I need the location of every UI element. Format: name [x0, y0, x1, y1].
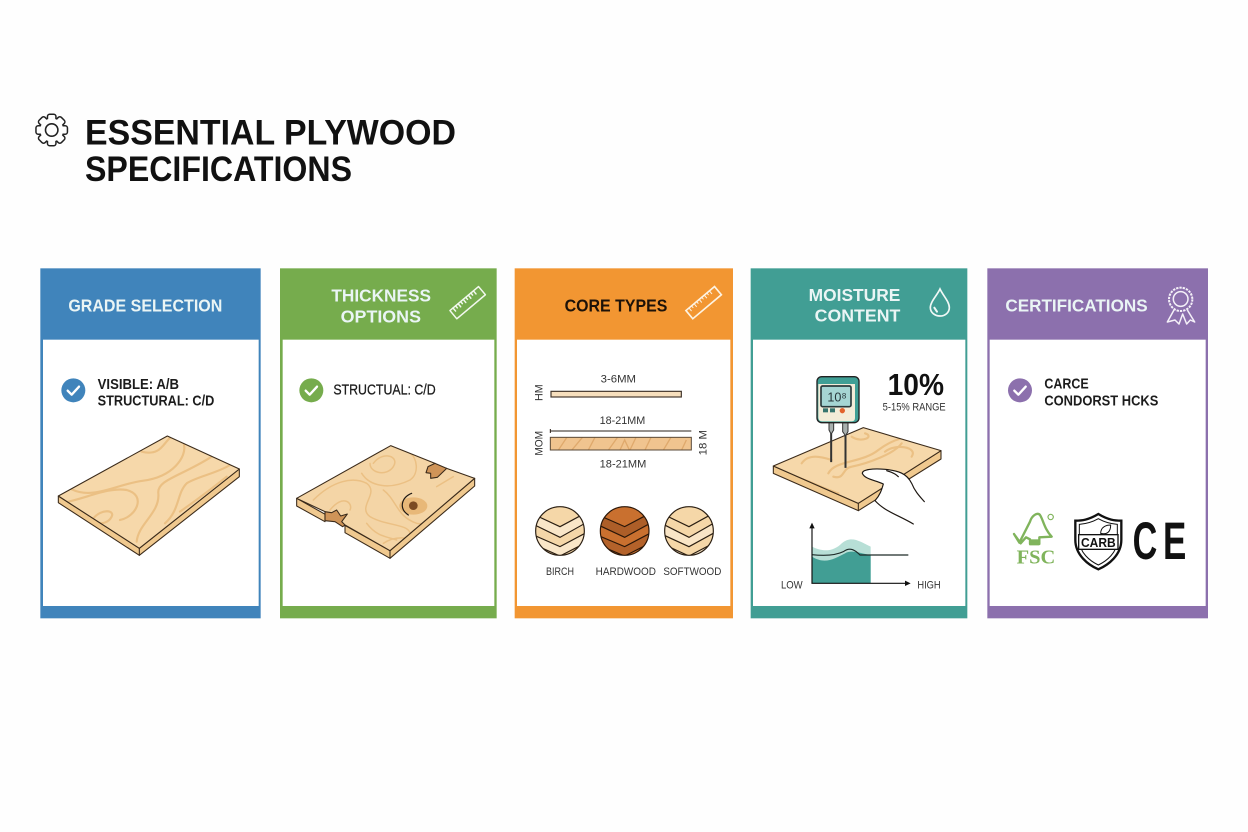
text: structural grade: STRUCTUAL: C/D: [333, 383, 436, 399]
heading: core types: CORE TYPES: [565, 296, 667, 316]
text: grades: [98, 377, 214, 410]
logo: CE: C: [1133, 512, 1157, 571]
icon: check: [61, 378, 85, 402]
panel: core types: [515, 268, 733, 618]
diagram: thick sheet: 18 M: [697, 430, 709, 455]
text: certification note: CONDORST HCKS: [1044, 393, 1158, 409]
heading: moisture content: [809, 285, 900, 326]
meter probes: [829, 419, 848, 467]
illustration: plywood sheet with knots: [297, 446, 475, 558]
chart: moisture range: [781, 523, 941, 591]
icon: award ribbon: [1167, 288, 1195, 324]
text: certification note: [1044, 377, 1158, 409]
diagram: thick sheet: MOM: [533, 431, 545, 456]
labels: core species: HARDWOOD: [596, 566, 656, 578]
panel: thickness options: [280, 268, 497, 618]
notch top: [426, 463, 447, 478]
diagram: thick sheet: 18-21MM: [600, 415, 645, 427]
text: grades: VISIBLE: A/B: [98, 377, 179, 393]
title: ESSENTIAL PLYWOOD: [85, 114, 456, 152]
icon: ruler: [686, 287, 721, 319]
diagram: thin sheet: [533, 374, 681, 401]
panel: moisture content: [751, 268, 967, 618]
labels: core species: SOFTWOOD: [663, 566, 721, 578]
heading: thickness options: OPTIONS: [341, 307, 421, 327]
labels: core species: BIRCH: [546, 566, 574, 578]
icon: gear: [37, 115, 67, 145]
diagram: thin sheet: 3-6MM: [601, 374, 636, 386]
chart: moisture range: HIGH: [917, 579, 941, 591]
text: certification note: CARCE: [1044, 377, 1089, 393]
moisture meter: [817, 377, 859, 423]
notch bottom: [325, 510, 347, 527]
text: grades: STRUCTURAL: C/D: [98, 394, 214, 410]
logo: CARB: CARB: [1081, 536, 1116, 550]
illustration: sheet and moisture meter: [773, 377, 941, 524]
reading: 10 percent: [883, 368, 946, 414]
heading: moisture content: CONTENT: [815, 306, 900, 326]
icon: check: [299, 378, 323, 402]
hand: [862, 469, 925, 524]
icon: hardwood core: [600, 506, 650, 556]
heading: moisture content: MOISTURE: [809, 285, 900, 305]
heading: grade selection: GRADE SELECTION: [68, 296, 222, 316]
diagram: thick sheet: [535, 416, 706, 468]
moisture meter: 10⁸: [827, 390, 847, 404]
panel: grade selection: [40, 268, 261, 618]
icon: water drop: [930, 289, 949, 316]
illustration: clean plywood sheet: [58, 436, 239, 555]
reading: 10 percent: 5-15% RANGE: [883, 402, 946, 414]
heading: thickness options: [331, 286, 431, 327]
knot: [399, 497, 427, 515]
reading: 10 percent: 10%: [888, 368, 944, 402]
icon: softwood core: [664, 506, 714, 556]
diagram: thick sheet: 18-21MM: [600, 458, 646, 470]
logo: CARB: [1075, 514, 1121, 569]
logo: FSC: [1014, 514, 1055, 568]
panel: certifications: [987, 268, 1208, 618]
diagram: thin sheet: HM: [533, 384, 545, 401]
title: SPECIFICATIONS: [85, 150, 352, 189]
heading: thickness options: THICKNESS: [331, 286, 431, 306]
icon: check: [1008, 378, 1032, 402]
labels: core species: [546, 566, 721, 578]
logo: CE: E: [1163, 512, 1186, 571]
heading: certifications: CERTIFICATIONS: [1005, 296, 1148, 316]
icon: birch core: [535, 506, 585, 556]
title: [85, 114, 456, 189]
chart: moisture range: LOW: [781, 579, 803, 591]
icon: ruler: [450, 287, 485, 319]
logo: FSC: FSC: [1017, 546, 1055, 568]
